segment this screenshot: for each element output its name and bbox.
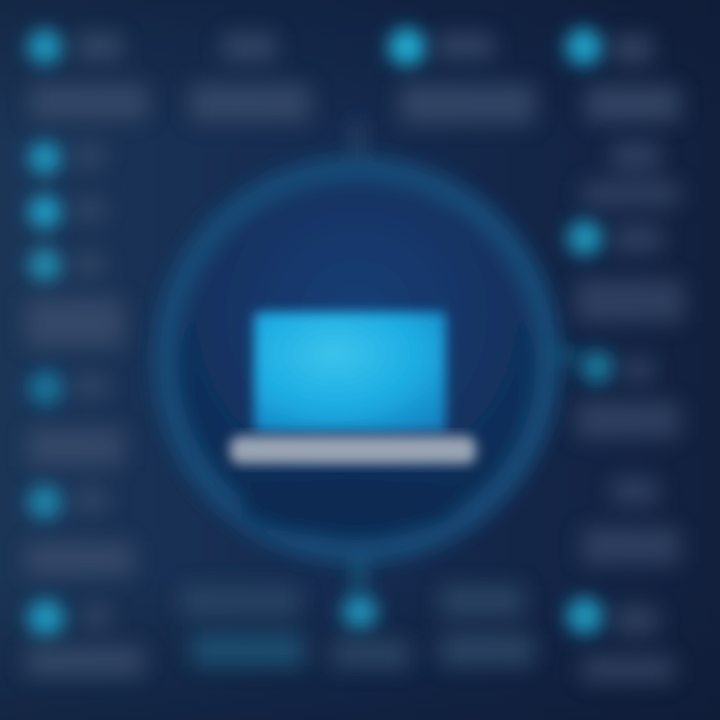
blurred text blocks: right column (576, 142, 684, 682)
blurred text blocks: left column (26, 34, 148, 676)
blurred text blocks: top row (190, 34, 680, 124)
laptop icon (230, 312, 476, 464)
laptop base (230, 436, 476, 464)
teal marker dots (27, 28, 614, 637)
blurred text blocks: bottom row (180, 586, 534, 668)
circular ring around laptop (165, 120, 580, 590)
laptop screen (254, 312, 446, 432)
